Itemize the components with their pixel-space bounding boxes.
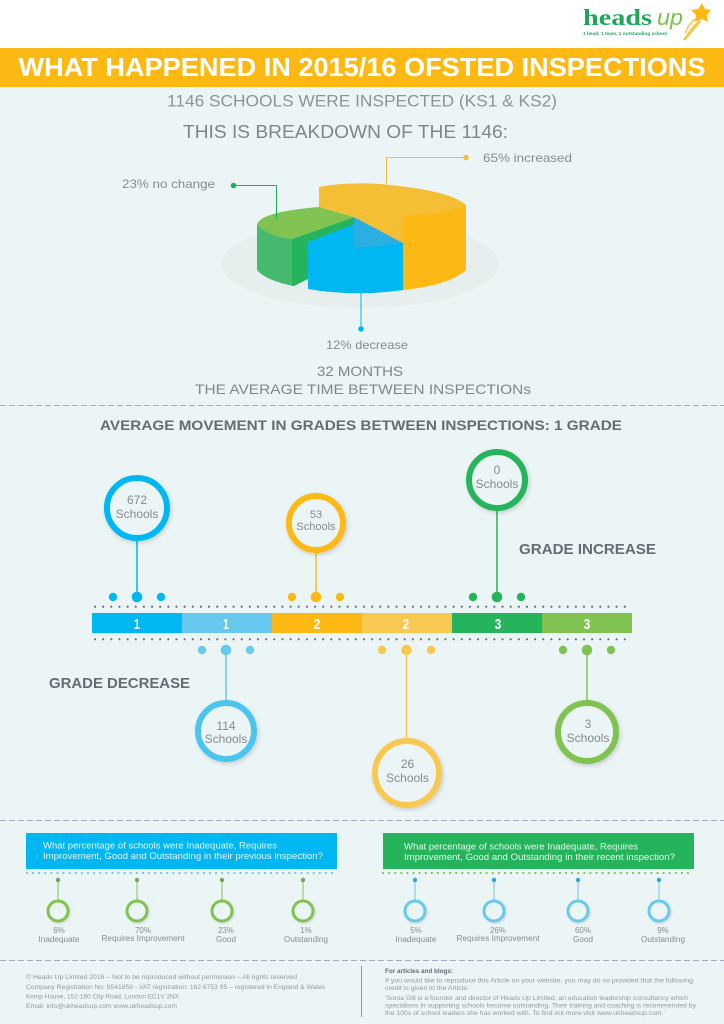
- panel: previous inspection: 23%: [218, 926, 234, 935]
- panel: previous inspection: 6%: [53, 926, 65, 935]
- marker: 0 schools: Schools: [476, 477, 518, 491]
- panel: recent inspection: 60%: [575, 926, 591, 935]
- marker: 0 schools: [469, 452, 525, 602]
- title banner: [0, 48, 724, 87]
- footer: company details: Kemp House, 152-160 City Road, London EC1V 2NX: [26, 994, 179, 1000]
- footer: company details: Company Registration No: 8541858 - VAT registration: 162 6753 95 – registered in England & Wales: [26, 985, 325, 991]
- marker: 114 schools: [198, 645, 254, 759]
- title banner: WHAT HAPPENED IN 2015/16 OFSTED INSPECTIONS: [18, 54, 705, 82]
- marker: 672 schools: [107, 478, 167, 602]
- text: 32 months: THE AVERAGE TIME BETWEEN INSPECTIONs: [195, 381, 531, 397]
- marker: 26 schools: Schools: [386, 771, 429, 785]
- marker: 26 schools: 26: [401, 757, 414, 771]
- grade scale bar: 2: [314, 616, 320, 633]
- footer: articles and blogs: ‘Sonia Gill is a founder and director of Heads Up Limited, an education leadership consultancy which: [385, 996, 688, 1002]
- logo: heads up: [583, 3, 711, 40]
- grade scale bar: [92, 613, 632, 633]
- text: 32 months: [195, 363, 531, 397]
- panel: recent inspection: What percentage of schools were Inadequate, Requires: [404, 842, 638, 852]
- label: grade decrease: GRADE DECREASE: [49, 675, 190, 692]
- subtitle: schools inspected: 1146 SCHOOLS WERE INSPECTED (KS1 & KS2): [167, 92, 557, 110]
- marker: 53 schools: Schools: [296, 521, 336, 533]
- footer: articles and blogs: If you would like to reproduce this Article on your website, you may do so provided that the following: [385, 978, 693, 984]
- pie slice: 23% no change: [257, 207, 354, 286]
- panel: previous inspection: Good: [216, 935, 236, 944]
- panel: recent inspection: 9%: [657, 926, 669, 935]
- panel: previous inspection: Outstanding: [284, 935, 328, 944]
- pie slice: 65% increased: [319, 183, 466, 290]
- panel: previous inspection: 1%: [300, 926, 312, 935]
- footer: articles and blogs: [385, 969, 696, 1017]
- grade scale bar: 2: [403, 616, 409, 633]
- heading: breakdown: THIS IS BREAKDOWN OF THE 1146:: [183, 122, 508, 142]
- logo: heads up: 1 head, 1 team, 1 outstanding school: [583, 31, 667, 36]
- panel: recent inspection: Requires Improvement: [456, 934, 540, 943]
- panel: recent inspection: Improvement, Good and Outstanding in their recent inspection?: [404, 852, 675, 863]
- pie chart: [221, 183, 499, 308]
- marker: 53 schools: 53: [310, 509, 322, 521]
- grade scale bar: 1: [223, 616, 229, 633]
- callout: 65% increased: [386, 151, 572, 183]
- footer: articles and blogs: the 100s of school leaders she has worked with. To find out more visit www.ukheadsup.com.’: [385, 1011, 665, 1017]
- panel: recent inspection: 26%: [490, 926, 506, 935]
- callout: 12% decrease: [326, 293, 408, 352]
- callout: 12% decrease: 12% decrease: [326, 338, 408, 352]
- text: 32 months: 32 MONTHS: [317, 363, 403, 379]
- panel: previous inspection: 70%: [135, 926, 151, 935]
- panel: previous inspection: Improvement, Good and Outstanding in their previous inspection?: [43, 851, 323, 862]
- marker: 672 schools: Schools: [116, 507, 158, 521]
- grade scale bar: 1: [134, 616, 140, 633]
- icon: shooting star: [683, 3, 711, 40]
- footer: articles and blogs: For articles and blogs:: [385, 969, 453, 975]
- marker: 26 schools: [375, 645, 439, 805]
- heading: average movement: AVERAGE MOVEMENT IN GRADES BETWEEN INSPECTIONS: 1 GRADE: [100, 417, 622, 433]
- panel: previous inspection: [26, 833, 337, 944]
- footer: articles and blogs: specialises in supporting schools become outstanding. Their training and coaching is recommended by: [385, 1004, 696, 1010]
- panel: recent inspection: Outstanding: [641, 935, 685, 944]
- label: grade increase: GRADE INCREASE: [519, 541, 656, 558]
- logo: heads up: heads: [583, 5, 652, 30]
- marker: 114 schools: Schools: [205, 732, 247, 746]
- callout: 23% no change: 23% no change: [122, 177, 215, 191]
- panel: recent inspection: Good: [573, 935, 593, 944]
- footer: articles and blogs: credit is given to the Article:: [385, 986, 469, 992]
- callout: 23% no change: [122, 177, 276, 219]
- grade scale bar: 3: [495, 616, 501, 633]
- panel: previous inspection: Inadequate: [38, 935, 80, 944]
- footer: company details: © Heads Up Limited 2016 – Not to be reproduced without permission – All rights reserved: [26, 974, 297, 981]
- panel: recent inspection: [383, 833, 694, 944]
- panel: previous inspection: What percentage of schools were Inadequate, Requires: [43, 840, 277, 852]
- footer: company details: Email: info@ukheadsup.com www.ukheadsup.com: [26, 1004, 177, 1010]
- marker: 3 schools: Schools: [567, 731, 609, 745]
- pie slice: 12% decrease: [308, 217, 403, 293]
- footer: company details: [26, 974, 325, 1010]
- marker: 53 schools: [288, 496, 344, 602]
- grade scale bar: 3: [584, 616, 590, 633]
- marker: 0 schools: 0: [494, 463, 501, 477]
- marker: 3 schools: 3: [585, 717, 592, 731]
- marker: 3 schools: [558, 645, 616, 761]
- callout: 65% increased: 65% increased: [483, 151, 572, 165]
- logo: heads up: up: [657, 5, 683, 30]
- marker: 114 schools: 114: [216, 719, 236, 733]
- marker: 672 schools: 672: [127, 493, 147, 507]
- panel: recent inspection: Inadequate: [396, 935, 437, 944]
- panel: previous inspection: Requires Improvement: [102, 934, 185, 943]
- panel: recent inspection: 5%: [410, 926, 422, 935]
